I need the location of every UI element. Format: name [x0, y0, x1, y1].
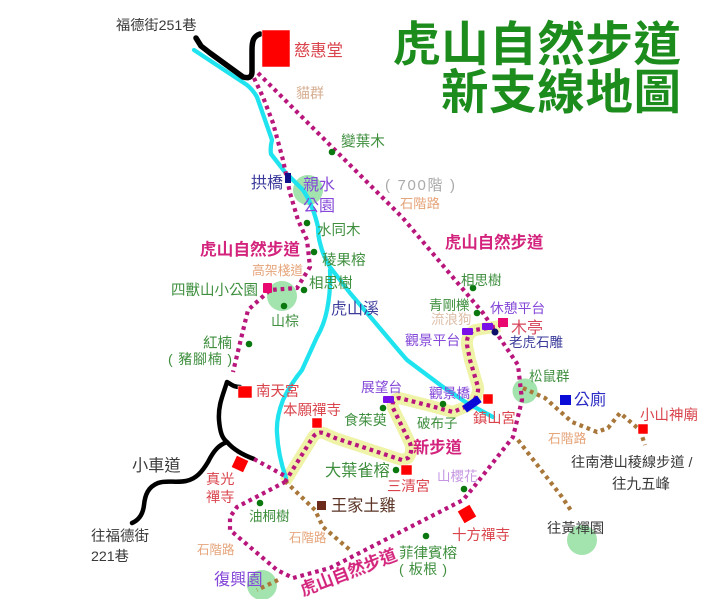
- map labels: 松鼠群: [529, 369, 570, 384]
- trail name labels: 虎山自然步道: [200, 239, 300, 259]
- title: [393, 19, 681, 120]
- map labels: 青剛櫟: [429, 298, 470, 313]
- map labels: 三清宮: [387, 478, 430, 495]
- map labels: 慈惠堂: [294, 42, 343, 60]
- map labels: 老虎石雕: [509, 335, 563, 350]
- map labels: 貓群: [296, 85, 324, 101]
- map labels: 真光: [206, 471, 234, 488]
- trail name labels: 新步道: [413, 438, 462, 457]
- map labels: 山櫻花: [437, 468, 478, 484]
- map labels: 相思樹: [461, 273, 502, 288]
- map labels: 流浪狗: [431, 312, 472, 327]
- map labels: 福德街251巷: [116, 18, 196, 34]
- map labels: 紅楠: [203, 335, 232, 352]
- green area circles: [247, 175, 597, 599]
- map labels: 菲律賓榕: [399, 544, 457, 562]
- map labels: 親水: [303, 176, 335, 194]
- map labels: 油桐樹: [249, 509, 290, 524]
- nature trail dotted lines: [230, 73, 522, 578]
- other square markers: [263, 173, 571, 510]
- map labels: 小山神廟: [640, 407, 698, 424]
- map labels: 公廁: [574, 390, 606, 409]
- map labels: 南天宮: [256, 383, 300, 400]
- map labels: 木亭: [511, 319, 543, 337]
- map labels: 王家土雞: [331, 497, 396, 515]
- map labels: 變葉木: [341, 133, 385, 150]
- map labels: 鎮山宮: [473, 411, 516, 427]
- map labels: 觀景橋: [429, 386, 470, 401]
- map labels: 石階路: [548, 431, 587, 446]
- title: 新支線地圖: [441, 67, 681, 120]
- map labels: 小車道: [132, 457, 181, 475]
- map labels: 往福德街: [91, 528, 149, 545]
- map labels: 水同木: [317, 222, 361, 239]
- map labels: 石階路: [400, 196, 440, 211]
- yellow new trail highlight: [285, 326, 500, 482]
- trail name labels: 虎山自然步道: [297, 545, 400, 599]
- map labels: ( 板根 ): [399, 561, 447, 577]
- map labels: 食茱萸: [344, 412, 387, 429]
- map labels: 觀景平台: [405, 333, 460, 348]
- map labels: 往九五峰: [612, 476, 670, 493]
- map labels: 往南港山稜線步道 /: [571, 454, 692, 471]
- map labels: 公園: [303, 197, 335, 215]
- map labels: 破布子: [417, 416, 458, 431]
- map labels: 禪寺: [206, 490, 234, 506]
- map labels: 221巷: [91, 549, 129, 565]
- map labels: 稜果榕: [322, 252, 366, 269]
- road: top: [196, 34, 260, 78]
- map labels: 大葉雀榕: [325, 462, 390, 480]
- map labels: 虎山溪: [331, 300, 379, 318]
- map labels: 復興園: [214, 571, 263, 589]
- tiger statue dot: [492, 328, 498, 336]
- map labels: 相思樹: [309, 275, 352, 292]
- map labels: 高架棧道: [252, 263, 303, 278]
- map labels: 展望台: [361, 380, 402, 395]
- trail name labels: 虎山自然步道: [445, 233, 544, 252]
- map labels: 本願禪寺: [283, 402, 341, 419]
- map labels: ( 豬腳楠 ): [168, 351, 232, 367]
- map labels: ( 700階 ): [385, 177, 455, 194]
- map labels: 石階路: [289, 530, 327, 545]
- trail name labels: [200, 233, 544, 599]
- tree dots: [246, 149, 480, 539]
- red temple markers: [231, 30, 648, 524]
- markers: [231, 30, 648, 539]
- road: small vehicle road: [132, 382, 254, 523]
- stone step paths: [257, 388, 645, 590]
- title: 虎山自然步道: [393, 19, 681, 72]
- map labels: 石階路: [197, 542, 235, 557]
- map labels: 拱橋: [251, 174, 283, 192]
- creek: [194, 50, 493, 478]
- map labels: 往黃禪園: [547, 520, 604, 537]
- map labels: 四獸山小公園: [171, 282, 258, 299]
- map labels: 山棕: [271, 313, 299, 329]
- map labels: 休憩平台: [490, 300, 545, 316]
- map labels: 十方禪寺: [452, 527, 510, 544]
